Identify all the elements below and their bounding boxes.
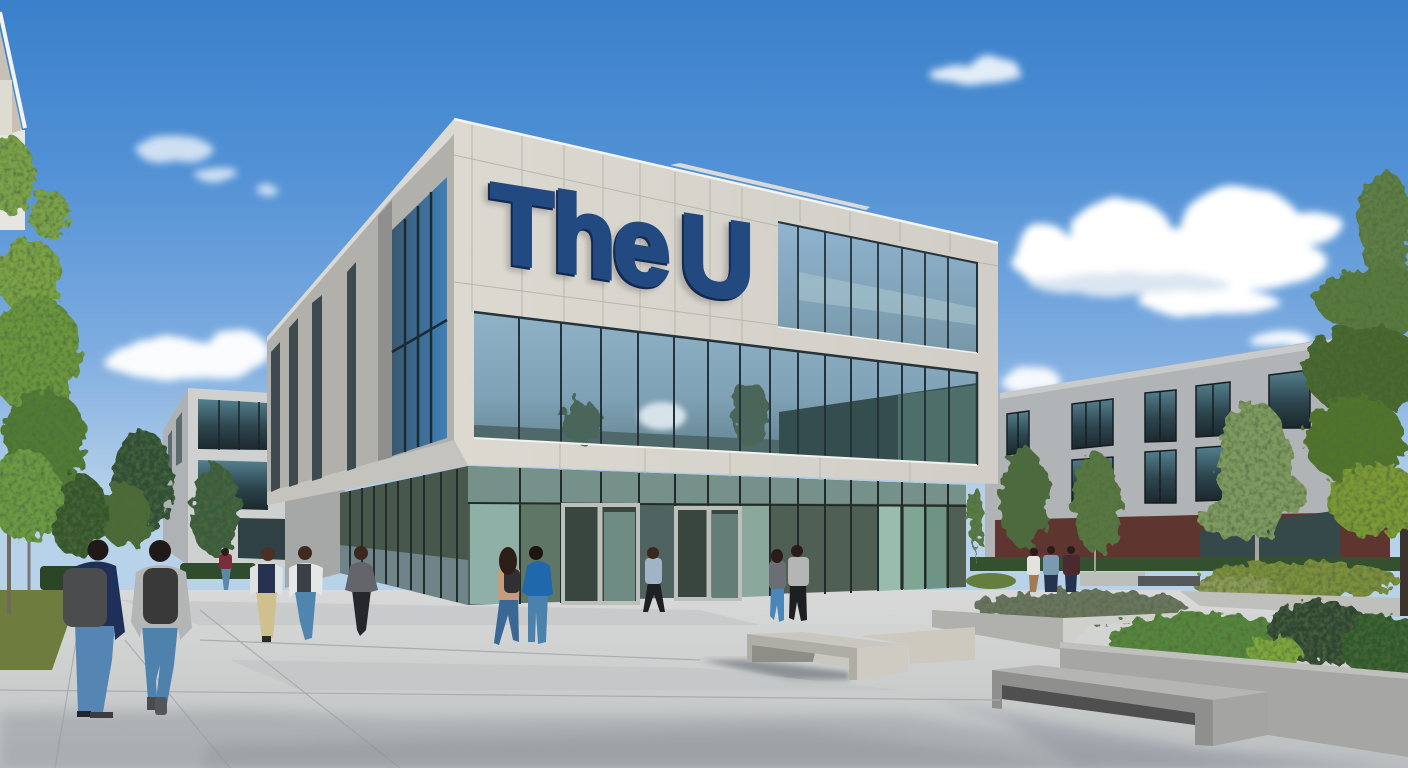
person: distant maroon	[219, 548, 232, 590]
windows on right building	[1007, 370, 1310, 506]
person: student with backpack navy hoodie	[63, 540, 125, 718]
tree: slim 2	[1073, 453, 1121, 572]
facade panel joints	[454, 125, 998, 482]
cloud: low right	[1000, 332, 1312, 392]
background building: left	[163, 388, 288, 566]
person: walking at doors	[643, 547, 665, 612]
person: blue jacket	[522, 546, 553, 644]
main building	[267, 119, 998, 605]
person: blue grey shirt	[1043, 546, 1059, 592]
ground shadows and paving joints	[0, 600, 1300, 768]
sign lettering face: The U	[491, 160, 754, 325]
tree: small at building corner	[967, 488, 985, 562]
trees: left foreground	[0, 137, 87, 614]
window reflection: cloud	[638, 402, 686, 430]
person: maroon jacket	[1063, 546, 1080, 592]
person: jeans white jacket	[289, 546, 323, 640]
roof edge	[454, 119, 998, 243]
cloud: mid left	[103, 329, 269, 381]
window reflection: horizon	[474, 425, 779, 455]
cloud: top centre right	[929, 57, 1021, 84]
grass patch	[0, 590, 80, 670]
bench: front right	[930, 665, 1400, 768]
upper right window	[778, 222, 977, 353]
background building: right	[985, 336, 1390, 560]
bench: centre	[700, 632, 908, 681]
clouds	[103, 57, 1346, 392]
background building: far left tower	[0, 12, 25, 230]
ground floor left glass	[340, 466, 468, 605]
person: white shirt	[1027, 548, 1040, 592]
person: student with backpack grey hoodie	[131, 540, 192, 715]
person: grey jacket	[345, 546, 378, 636]
people group: by entrance	[494, 545, 809, 645]
sign lettering side: The U	[489, 162, 752, 327]
tree: large right foreground	[1303, 170, 1408, 616]
left face large window	[392, 177, 447, 456]
person: woman with backpack	[494, 547, 520, 645]
cloud: large right	[1012, 187, 1346, 316]
ground floor back wall	[285, 490, 345, 588]
hedges behind plaza	[40, 557, 1400, 590]
people group: far left pair	[63, 540, 192, 718]
middle planter	[932, 590, 1195, 650]
tree: slim 1	[1000, 448, 1048, 548]
entrance door right	[676, 508, 740, 599]
middle window band	[474, 312, 977, 465]
people group: students facing camera	[219, 546, 378, 642]
people group: distant trio	[1027, 546, 1080, 592]
sign lettering cast shadow: The U	[485, 165, 748, 330]
front right planter with plants	[1060, 600, 1408, 757]
bench: centre block behind	[860, 627, 975, 664]
ground floor front glass	[468, 466, 966, 605]
left face	[267, 119, 468, 505]
person: woman grey top	[769, 549, 786, 622]
plaza ground	[0, 590, 1408, 768]
front facade	[454, 119, 998, 484]
sign: The U	[485, 160, 754, 330]
person: tan trousers	[250, 547, 283, 642]
person: man light grey top	[788, 545, 809, 621]
back planter with shrubs	[1080, 562, 1400, 617]
background trees: left	[48, 430, 240, 557]
window reflection: trees	[561, 380, 768, 448]
left face slim windows	[271, 262, 356, 492]
trees: right side	[967, 170, 1408, 616]
entrance door left	[563, 505, 638, 603]
window reflection: building	[779, 383, 977, 465]
cloud: upper left	[137, 136, 277, 195]
tree: light green centre right	[1198, 402, 1307, 582]
